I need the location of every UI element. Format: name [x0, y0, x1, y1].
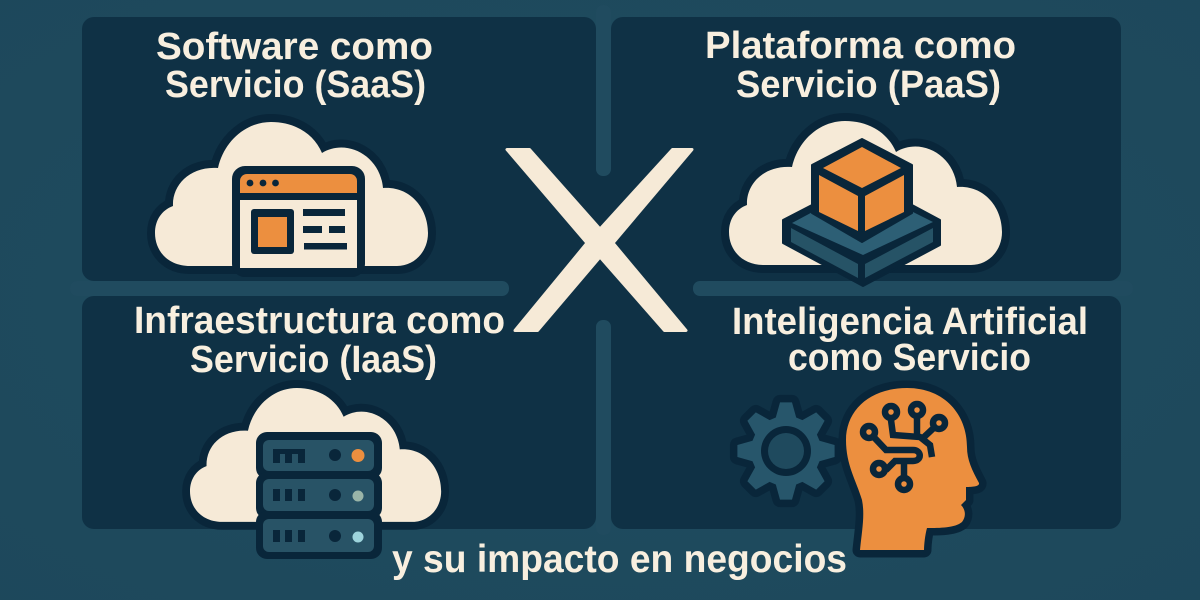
- icon: cloud with server rack: [190, 388, 441, 559]
- panel: AI as a Service: [732, 301, 1088, 550]
- heading: SaaS: Servicio (SaaS): [165, 64, 426, 106]
- icon: cloud with browser window: [155, 122, 428, 273]
- heading: AI: [732, 301, 1088, 379]
- heading: PaaS: [705, 25, 1016, 106]
- panel: PaaS: [705, 25, 1016, 286]
- heading: AI: Inteligencia Artificial: [732, 301, 1088, 343]
- center X symbol: [507, 150, 692, 330]
- heading: SaaS: [156, 26, 433, 106]
- heading: PaaS: Servicio (PaaS): [736, 64, 1001, 106]
- heading: SaaS: Software como: [156, 26, 433, 68]
- heading: IaaS: Infraestructura como: [134, 300, 505, 342]
- heading: PaaS: Plataforma como: [705, 25, 1016, 67]
- panel: IaaS: [134, 300, 505, 559]
- panels backdrop: [70, 5, 1133, 535]
- icon: gear: [737, 402, 835, 500]
- icon: head with circuit: [846, 388, 979, 550]
- heading: IaaS: [134, 300, 505, 381]
- heading: AI: como Servicio: [788, 337, 1031, 379]
- icon: cloud with cube on platform: [729, 121, 1002, 286]
- caption: y su impacto en negocios: [392, 538, 847, 581]
- panel: SaaS: [155, 26, 433, 273]
- heading: IaaS: Servicio (IaaS): [190, 339, 437, 381]
